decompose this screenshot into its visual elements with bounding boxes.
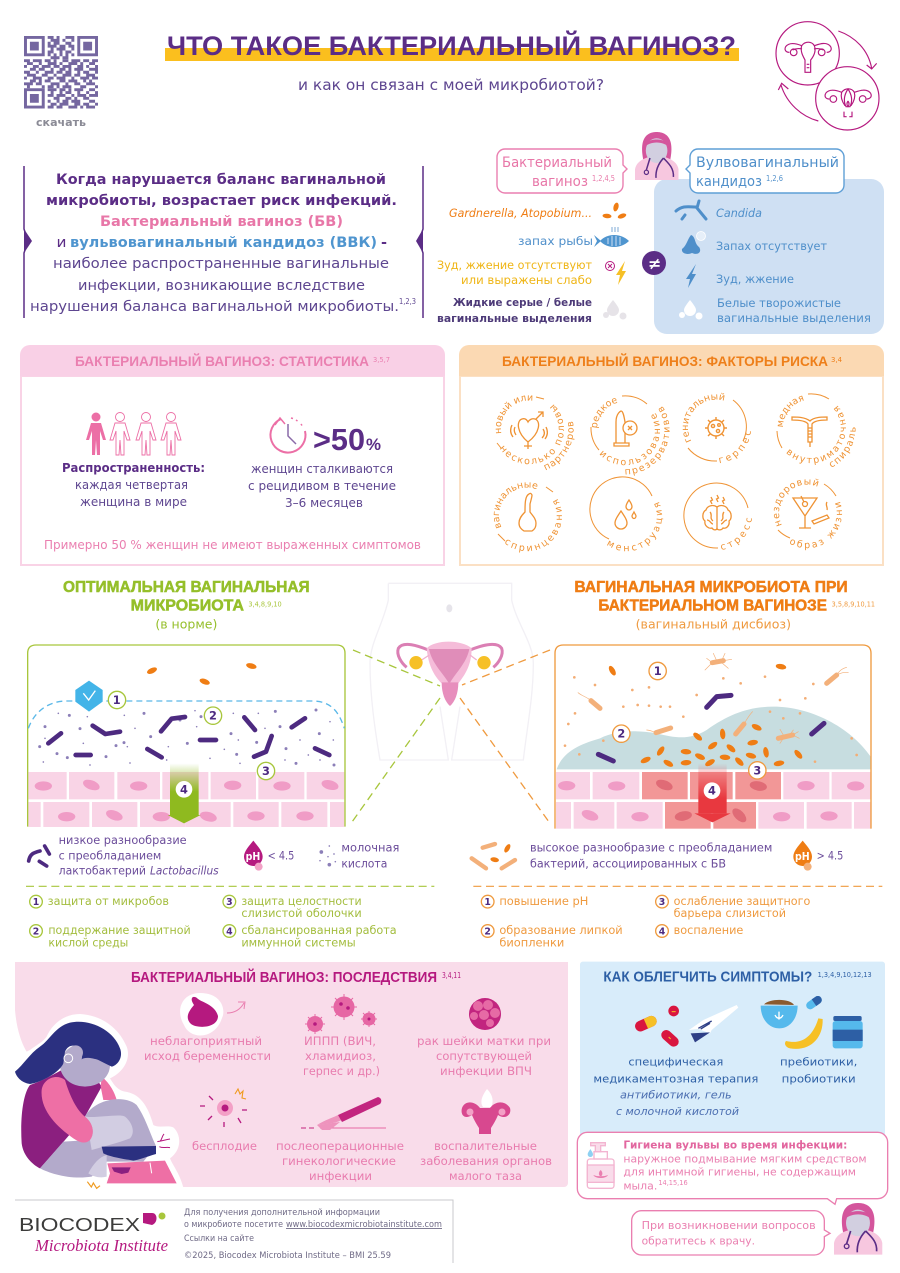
risk factors heading: БАКТЕРИАЛЬНЫЙ ВАГИНОЗ: ФАКТОРЫ РИСКА bbox=[502, 352, 828, 369]
list: consequences: барьера слизистой bbox=[674, 906, 786, 920]
risk: copper IUD: внутриматочная bbox=[786, 406, 846, 465]
list: consequences: воспаление bbox=[674, 923, 743, 937]
panel: intro statement: инфекции, возникающие вследствие bbox=[78, 278, 365, 294]
text: prebiotics bbox=[780, 1056, 857, 1085]
panel: intro statement: вульвовагинальный кандидоз (ВВК) bbox=[70, 235, 377, 251]
statistic: greater than 50 percent: >50 bbox=[313, 422, 365, 457]
text: cervical cancer: сопутствующей bbox=[436, 1049, 532, 1063]
QR code bbox=[24, 37, 98, 107]
row: no odour VVC bbox=[682, 232, 827, 254]
list: benefits: 4 bbox=[226, 926, 233, 937]
row: itching BV: Зуд, жжение отсутствуют bbox=[437, 258, 592, 272]
legend: low diversity: Lactobacillus bbox=[150, 864, 219, 878]
risk: condoms: использование bbox=[600, 413, 660, 466]
risk: unhealthy lifestyle: образ жизни bbox=[790, 502, 842, 550]
row: no odour VVC: Запах отсутствует bbox=[716, 239, 827, 253]
diagram: dysbiotic mucosa bbox=[555, 645, 871, 829]
panel: consequences: 3,4,11 bbox=[442, 971, 461, 980]
subtitle: и как он связан с моей микробиотой? bbox=[298, 76, 604, 94]
illustration: seated woman bbox=[5, 1010, 184, 1190]
connector lines bbox=[352, 650, 550, 822]
risk: partners: партнеров bbox=[544, 422, 574, 470]
bubble: hygiene advice bbox=[577, 1132, 888, 1204]
row: discharge BV: вагинальные выделения bbox=[437, 312, 592, 325]
risk: unhealthy lifestyle bbox=[774, 478, 842, 550]
icon: cervical cells bbox=[469, 998, 501, 1030]
peach bacilli bbox=[578, 653, 848, 743]
bubble: bacterial vaginosis: 1,2,4,5 bbox=[592, 174, 615, 183]
bubble: vulvovaginal candidiasis: 1,2,6 bbox=[766, 174, 783, 183]
arrow: inflammation bbox=[694, 763, 731, 822]
logo: Microbiota Institute bbox=[34, 1236, 168, 1255]
risk: douching bbox=[494, 482, 562, 552]
panel: risk factors bbox=[459, 345, 884, 566]
row: fish odour BV bbox=[518, 227, 629, 248]
text: pregnancy bbox=[144, 1034, 271, 1063]
legend: low diversity bbox=[29, 833, 219, 878]
panel: candidiasis column background bbox=[654, 179, 884, 334]
list: benefits bbox=[30, 894, 397, 949]
hygiene text: Гигиена вульвы во время инфекции: bbox=[623, 1139, 847, 1151]
legend: pH below 4.5: pH bbox=[246, 850, 260, 863]
text: drug therapy: с молочной кислотой bbox=[616, 1105, 739, 1118]
text: STIs bbox=[303, 1034, 380, 1078]
heading bbox=[63, 579, 310, 632]
row: candida VVC bbox=[676, 201, 762, 220]
list: consequences: 3 bbox=[659, 897, 665, 908]
row: bacteria BV: Gardnerella, Atopobium... bbox=[449, 206, 592, 220]
text: drug therapy bbox=[593, 1056, 758, 1118]
text: pregnancy: неблагоприятный bbox=[150, 1034, 262, 1048]
footer text bbox=[184, 1208, 442, 1261]
diagram: healthy mucosa: 4 bbox=[180, 782, 188, 796]
footer text: Для получения дополнительной информации bbox=[184, 1208, 380, 1218]
title: ЧТО ТАКОЕ БАКТЕРИАЛЬНЫЙ ВАГИНОЗ? bbox=[167, 31, 736, 61]
list: consequences: повышение pH bbox=[499, 894, 588, 908]
text: asymptomatic note: Примерно 50 % женщин не имеют выраженных симптомов bbox=[44, 538, 421, 552]
list: benefits: 2 bbox=[33, 926, 39, 937]
legend: low diversity: с преобладанием bbox=[59, 848, 161, 862]
heading: БАКТЕРИАЛЬНОМ ВАГИНОЗЕ bbox=[598, 597, 827, 614]
text: pelvic disease bbox=[420, 1139, 552, 1183]
text: prevalence: женщина в мире bbox=[80, 495, 187, 509]
panel: intro statement: микробиоты, возрастает риск инфекций. bbox=[46, 193, 397, 209]
risk: partners: новый или bbox=[496, 395, 532, 434]
list: benefits: иммунной системы bbox=[241, 935, 356, 949]
anatomy: body silhouette bbox=[370, 583, 533, 760]
text: recurrence: с рецидивом в течение bbox=[248, 479, 396, 493]
text: infertility: бесплодие bbox=[192, 1139, 257, 1153]
row: white discharge VVC: вагинальные выделения bbox=[717, 311, 871, 325]
legend: pH above 4.5 bbox=[793, 841, 843, 871]
row: itching VVC: Зуд, жжение bbox=[716, 272, 794, 286]
row: itching VVC bbox=[686, 264, 794, 288]
QR caption: скачать bbox=[36, 116, 86, 129]
diagram: healthy mucosa: 2 bbox=[209, 709, 217, 723]
risk: douching: спринцевания bbox=[505, 499, 562, 552]
text: drug therapy: антибиотики, гель bbox=[620, 1089, 732, 1102]
remaining lactobacilli bbox=[598, 695, 824, 761]
risk: stress bbox=[683, 482, 752, 550]
heading: ВАГИНАЛЬНАЯ МИКРОБИОТА ПРИ bbox=[574, 579, 848, 596]
lactobacilli bbox=[48, 717, 329, 757]
bubble: see a doctor bbox=[632, 1211, 830, 1255]
legend: high diversity bbox=[472, 841, 772, 870]
icon: clock bbox=[270, 418, 305, 453]
diagram: dysbiotic mucosa: 1 bbox=[654, 664, 662, 678]
icon: doctor bbox=[635, 132, 678, 180]
list: benefits: защита целостности bbox=[241, 894, 362, 908]
hygiene text bbox=[623, 1139, 867, 1192]
panel: intro statement: Когда нарушается баланс вагинальной bbox=[56, 172, 386, 188]
row: white discharge VVC: Белые творожистые bbox=[717, 296, 841, 310]
text: recurrence: 3–6 месяцев bbox=[285, 496, 363, 510]
bubble: vulvovaginal candidiasis bbox=[686, 149, 844, 193]
heading: БАКТЕРИАЛЬНЫЙ ВАГИНОЗ: ПОСЛЕДСТВИЯ bbox=[131, 968, 437, 986]
legend: lactic acid: кислота bbox=[341, 856, 387, 870]
panel: intro statement: 1,2,3 bbox=[399, 297, 416, 306]
icon: inflamed uterus bbox=[462, 1089, 510, 1134]
protective film bbox=[28, 701, 344, 728]
lactic acid dots bbox=[40, 710, 334, 765]
bubble: vulvovaginal candidiasis: Вулвовагинальный bbox=[696, 155, 839, 171]
arrow: immune signalling bbox=[168, 763, 201, 823]
list: consequences: 4 bbox=[659, 926, 666, 937]
legend: low diversity: низкое разнообразие bbox=[59, 833, 187, 847]
icon: cycle of two uteri bbox=[776, 22, 879, 130]
icon: four women bbox=[86, 412, 181, 455]
panel: symptom relief bbox=[580, 962, 885, 1142]
text: pelvic disease: заболевания органов bbox=[420, 1154, 552, 1168]
legend: high diversity: высокое разнообразие с преобладанием bbox=[530, 841, 772, 855]
peach dots bbox=[565, 677, 857, 762]
list: benefits: слизистой оболочки bbox=[241, 906, 362, 920]
heading: 1,3,4,9,10,12,13 bbox=[818, 971, 872, 979]
diagram: healthy mucosa bbox=[28, 645, 345, 827]
not-equal badge bbox=[642, 251, 666, 275]
heading: (вагинальный дисбиоз) bbox=[636, 618, 791, 632]
text: cervical cancer: рак шейки матки при bbox=[417, 1034, 551, 1048]
icon: fetus bbox=[180, 993, 245, 1035]
bubble: vulvovaginal candidiasis: кандидоз bbox=[696, 174, 762, 190]
list: consequences: 2 bbox=[484, 926, 491, 937]
row: bacteria BV bbox=[449, 202, 627, 220]
section: optimal microbiota bbox=[26, 579, 434, 949]
panel: intro statement: и bbox=[56, 235, 66, 251]
legend: lactic acid bbox=[320, 841, 399, 870]
text: post-operative: послеоперационные bbox=[276, 1139, 404, 1153]
list: consequences bbox=[481, 894, 810, 949]
list: benefits: сбалансированная работа bbox=[241, 923, 397, 937]
hygiene text: 14,15,16 bbox=[658, 1179, 688, 1187]
risk: genital herpes: генитальный bbox=[682, 392, 724, 443]
risk: copper IUD: спираль bbox=[830, 427, 856, 467]
legend: high diversity: бактерий, ассоциированных с БВ bbox=[530, 856, 726, 870]
list: benefits: поддержание защитной bbox=[48, 923, 191, 937]
risk: douching: вагинальные bbox=[494, 482, 538, 528]
heading: 3,4,8,9,10 bbox=[248, 601, 282, 609]
logo: BIOCODEX bbox=[19, 1215, 140, 1235]
legend: pH below 4.5 bbox=[244, 841, 294, 871]
row: fish odour BV: запах рыбы bbox=[518, 234, 593, 248]
icon: prebiotics and probiotics bbox=[761, 994, 863, 1049]
list: benefits: защита от микробов bbox=[48, 894, 169, 908]
row: candida VVC: Candida bbox=[716, 206, 762, 220]
risk: unhealthy lifestyle: нездоровый bbox=[774, 478, 819, 526]
text: prevalence: Распространенность: bbox=[62, 461, 205, 475]
orange BV bacteria bbox=[607, 663, 804, 768]
hygiene text: мыла. bbox=[623, 1180, 657, 1192]
text: pelvic disease: малого таза bbox=[449, 1169, 522, 1183]
panel: intro statement bbox=[24, 166, 423, 318]
text: drug therapy: медикаментозная терапия bbox=[593, 1072, 758, 1085]
panel: intro statement: Бактериальный вагиноз (БВ) bbox=[100, 214, 343, 230]
text: recurrence bbox=[248, 462, 396, 510]
text: post-operative: гинекологические bbox=[282, 1154, 396, 1168]
text: STIs: ИППП (ВИЧ, bbox=[304, 1034, 376, 1048]
list: benefits: 1 bbox=[33, 897, 39, 908]
list: consequences: образование липкой bbox=[499, 923, 623, 937]
row: itching BV: или выражены слабо bbox=[461, 273, 592, 287]
risk: genital herpes bbox=[682, 392, 751, 464]
footer text: о микробиоте посетите bbox=[184, 1220, 283, 1230]
row: discharge BV bbox=[437, 296, 626, 325]
statistic: greater than 50 percent: % bbox=[366, 435, 381, 454]
risk: menstruation: менструация bbox=[607, 502, 664, 552]
list: consequences: ослабление защитного bbox=[674, 894, 810, 908]
row: itching BV bbox=[437, 258, 626, 287]
text: cervical cancer bbox=[417, 1034, 551, 1078]
footer text: ©2025, Biocodex Microbiota Institute – BMI 25.59 bbox=[184, 1251, 391, 1261]
footer text: www.biocodexmicrobiotainstitute.com bbox=[286, 1220, 442, 1230]
legend: lactic acid: молочная bbox=[341, 841, 399, 855]
panel: intro statement: наиболее распространенные вагинальные bbox=[53, 256, 389, 272]
section: bacterial vaginosis microbiota bbox=[472, 579, 882, 949]
panel: consequences bbox=[5, 962, 568, 1190]
heading: ОПТИМАЛЬНАЯ ВАГИНАЛЬНАЯ bbox=[63, 579, 310, 596]
diagram: healthy mucosa: 1 bbox=[113, 693, 121, 707]
text: cervical cancer: инфекции ВПЧ bbox=[440, 1064, 532, 1078]
footer text: Ссылки на сайте bbox=[184, 1234, 254, 1244]
icon: infertility bbox=[200, 1089, 247, 1127]
text: pregnancy: исход беременности bbox=[144, 1049, 271, 1063]
icon: medication bbox=[633, 1005, 738, 1049]
risk: partners: несколько половых bbox=[500, 404, 564, 464]
diagram: dysbiotic mucosa: 4 bbox=[708, 784, 716, 798]
list: benefits: кислой среды bbox=[48, 935, 128, 949]
text: STIs: хламидиоз, bbox=[305, 1049, 376, 1063]
text: recurrence: женщин сталкиваются bbox=[251, 462, 393, 476]
risk: condoms: редкое bbox=[592, 398, 618, 428]
heading: КАК ОБЛЕГЧИТЬ СИМПТОМЫ? bbox=[603, 970, 812, 986]
footer bbox=[15, 1200, 453, 1263]
bubble: bacterial vaginosis bbox=[497, 149, 627, 193]
legend: low diversity: лактобактерий bbox=[59, 864, 146, 878]
legend: pH above 4.5: pH bbox=[795, 850, 810, 863]
panel: statistics bbox=[20, 345, 445, 565]
diagram: dysbiotic mucosa: 3 bbox=[753, 763, 761, 777]
text: prebiotics: пребиотики, bbox=[780, 1056, 857, 1069]
risk: condoms bbox=[590, 395, 670, 476]
legend: pH below 4.5: < 4.5 bbox=[268, 848, 294, 862]
heading: (в норме) bbox=[155, 618, 217, 632]
markers bbox=[613, 662, 766, 799]
icon: viruses bbox=[305, 994, 377, 1034]
heading bbox=[574, 579, 875, 632]
risk: genital herpes: герпес bbox=[719, 430, 751, 464]
panel: intro statement: нарушения баланса вагинальной микробиоты. bbox=[30, 299, 399, 315]
row: white discharge VVC bbox=[679, 296, 871, 325]
diagram: healthy mucosa: 3 bbox=[262, 764, 270, 778]
bubble: see a doctor: обратитесь к врачу. bbox=[642, 1235, 755, 1247]
text: drug therapy: специфическая bbox=[628, 1056, 723, 1069]
diagram: dysbiotic mucosa: 2 bbox=[617, 727, 625, 741]
risk: stress: стресс bbox=[721, 518, 752, 550]
icon: doctor bottom bbox=[834, 1203, 882, 1255]
logo bbox=[19, 1212, 168, 1255]
icon: soap bottle bbox=[587, 1143, 614, 1188]
list: consequences: биопленки bbox=[499, 935, 564, 949]
panel: statistics: 3,5,7 bbox=[373, 356, 390, 364]
hygiene text: наружное подмывание мягким средством bbox=[623, 1153, 867, 1165]
text: prevalence bbox=[62, 461, 205, 509]
row: discharge BV: Жидкие серые / белые bbox=[453, 296, 592, 309]
bubble: bacterial vaginosis: вагиноз bbox=[532, 174, 588, 190]
text: pelvic disease: воспалительные bbox=[434, 1139, 537, 1153]
text: post-operative bbox=[276, 1139, 404, 1183]
pathogens kept out bbox=[146, 662, 257, 686]
hygiene text: для интимной гигиены, не содержащим bbox=[623, 1167, 856, 1179]
heading: 3,5,8,9,10,11 bbox=[832, 601, 875, 609]
text: prebiotics: пробиотики bbox=[782, 1072, 856, 1085]
markers bbox=[108, 691, 275, 798]
bubble: bacterial vaginosis: Бактериальный bbox=[502, 155, 612, 171]
not-equal badge: ≠ bbox=[648, 254, 661, 273]
text: post-operative: инфекции bbox=[309, 1169, 372, 1183]
anatomy: uterus bbox=[398, 642, 502, 706]
list: benefits: 3 bbox=[226, 897, 233, 908]
panel: risk factors: 3,4 bbox=[831, 356, 843, 364]
icon: shield bbox=[75, 681, 103, 712]
risk: menstruation bbox=[589, 476, 664, 552]
risk: condoms: презервативов bbox=[625, 406, 670, 476]
icon: scalpel bbox=[301, 1097, 386, 1130]
heading: МИКРОБИОТА bbox=[131, 597, 244, 614]
panel: intro statement: - bbox=[381, 235, 387, 251]
bubble: see a doctor: При возникновении вопросов bbox=[642, 1220, 816, 1232]
text: prevalence: каждая четвертая bbox=[75, 478, 188, 492]
text: STIs: герпес и др.) bbox=[303, 1064, 380, 1078]
legend: pH above 4.5: > 4.5 bbox=[817, 848, 843, 862]
statistics heading: БАКТЕРИАЛЬНЫЙ ВАГИНОЗ: СТАТИСТИКА bbox=[75, 352, 369, 369]
list: consequences: 1 bbox=[484, 897, 491, 908]
biofilm bbox=[557, 707, 871, 769]
risk: copper IUD: медная bbox=[778, 396, 804, 427]
